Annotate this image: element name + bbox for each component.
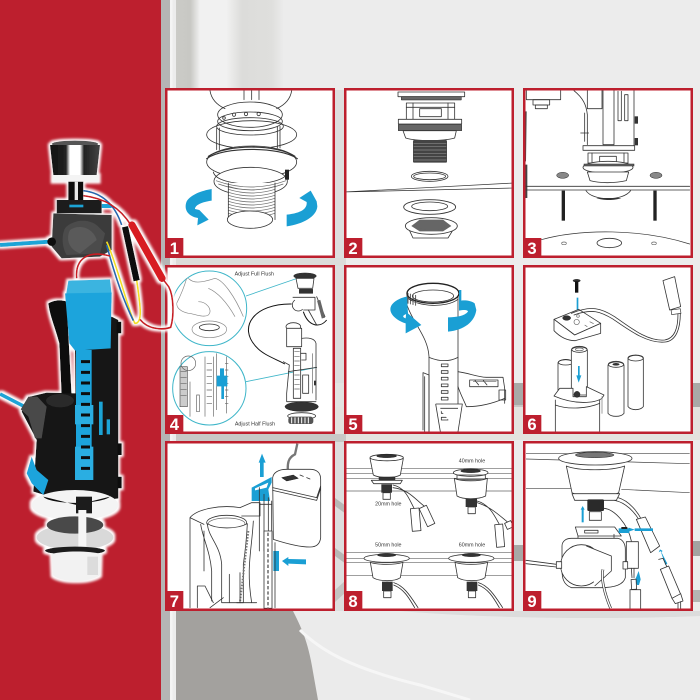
panel 9: connecting valve: 9 [527, 592, 537, 611]
panel 6: battery pack: 6 [527, 415, 537, 434]
product photo: flush valve [0, 141, 173, 581]
icon: rotate arrow right [448, 290, 476, 332]
panel 8: button hole sizes [326, 438, 526, 638]
black valve body [21, 300, 122, 505]
panel 4: adjust flush [160, 260, 360, 460]
button: 60mm [449, 553, 503, 608]
panel 3: fitting into cistern: 3 [527, 239, 537, 258]
panel 6: battery pack [515, 260, 700, 460]
icon: rotate arrow right [287, 191, 317, 226]
tube: upper air hose [0, 242, 50, 245]
label: 40mm hole: 40mm hole [459, 458, 485, 464]
background: bathroom photo [161, 0, 700, 700]
panel 7: fitting tank: 7 [170, 592, 179, 611]
button: 40mm [453, 469, 513, 547]
red side band [0, 0, 161, 700]
button: 20mm [370, 454, 435, 531]
panel 2: sealing washer and nut [326, 85, 526, 285]
sensor housing [47, 200, 112, 258]
panel 8: button hole sizes: 8 [348, 592, 358, 611]
label: adjust half flush: Adjust Half Flush [235, 421, 275, 427]
panel 3: fitting into cistern [515, 85, 700, 285]
mechanism drawing [294, 273, 316, 279]
panel 7: fitting tank [160, 438, 360, 638]
panel 9: connecting valve [515, 438, 700, 638]
panel 1: unscrew thread: 1 [170, 239, 179, 258]
label: 20mm hole: 20mm hole [375, 502, 402, 508]
panel 5: rotate top section [326, 260, 526, 460]
panel 5: rotate top section: 5 [348, 415, 358, 434]
icon: rotate arrow left [186, 189, 212, 225]
icon: rotate arrow left [390, 297, 421, 333]
button: 50mm [364, 553, 418, 608]
label: adjust full flush: Adjust Full Flush [235, 271, 274, 277]
wires and connectors [77, 191, 173, 329]
push button [50, 141, 100, 202]
label: 60mm hole: 60mm hole [459, 542, 485, 548]
blue tank [27, 279, 112, 495]
panel 2: sealing washer and nut: 2 [348, 239, 358, 258]
panel 4: adjust flush: 4 [170, 415, 180, 434]
panel 1: unscrew thread [160, 85, 360, 285]
tube: lower air hose [0, 394, 23, 406]
white base [32, 490, 118, 581]
label: 50mm hole: 50mm hole [375, 542, 402, 548]
